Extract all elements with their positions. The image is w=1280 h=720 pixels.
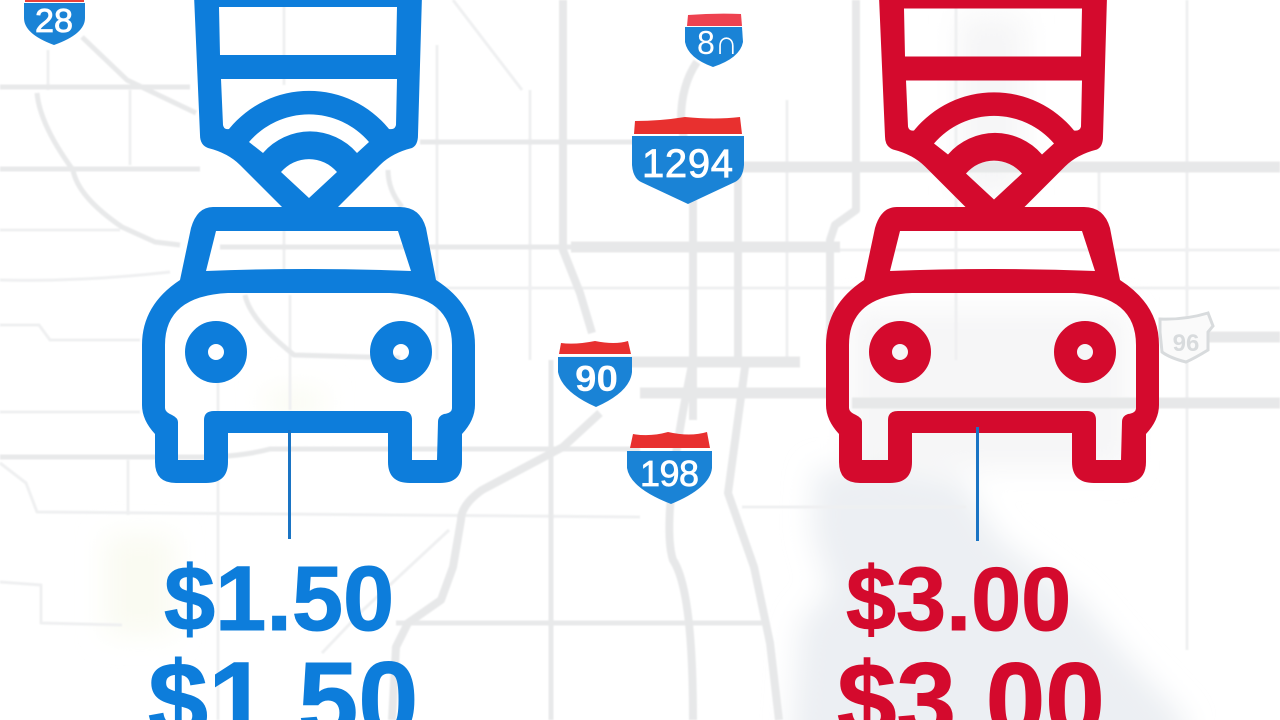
icon: highway shield 1294 [632, 117, 744, 204]
price: $1.50: $1.50 [164, 548, 394, 650]
icon: highway shield 1294: 1294 [642, 142, 733, 186]
icon: highway shield top: 8∩ [697, 24, 738, 61]
connector line [288, 430, 291, 539]
icon: highway shield 90: 90 [575, 358, 618, 399]
icon: blue car [142, 207, 475, 483]
icon: red car [826, 207, 1159, 483]
icon: highway shield 28 [24, 0, 85, 45]
icon: red transponder with wifi signal [879, 0, 1107, 210]
panel: standard toll (blue) [142, 0, 475, 720]
icon: blue transponder with wifi signal [194, 0, 422, 208]
connector line [976, 427, 979, 541]
panel: higher toll (red) [826, 0, 1159, 720]
icon: highway shield 90 [558, 341, 632, 407]
price: $3.00: $3.00 [846, 550, 1071, 650]
icon: highway shield 198 [627, 432, 712, 504]
icon: highway shield top [685, 14, 743, 67]
icon: highway shield 198: 198 [640, 453, 699, 494]
icon: faded highway shield: 96 [1173, 330, 1199, 357]
icon: highway shield 28: 28 [35, 2, 73, 39]
icon: faded highway shield [1160, 313, 1213, 362]
